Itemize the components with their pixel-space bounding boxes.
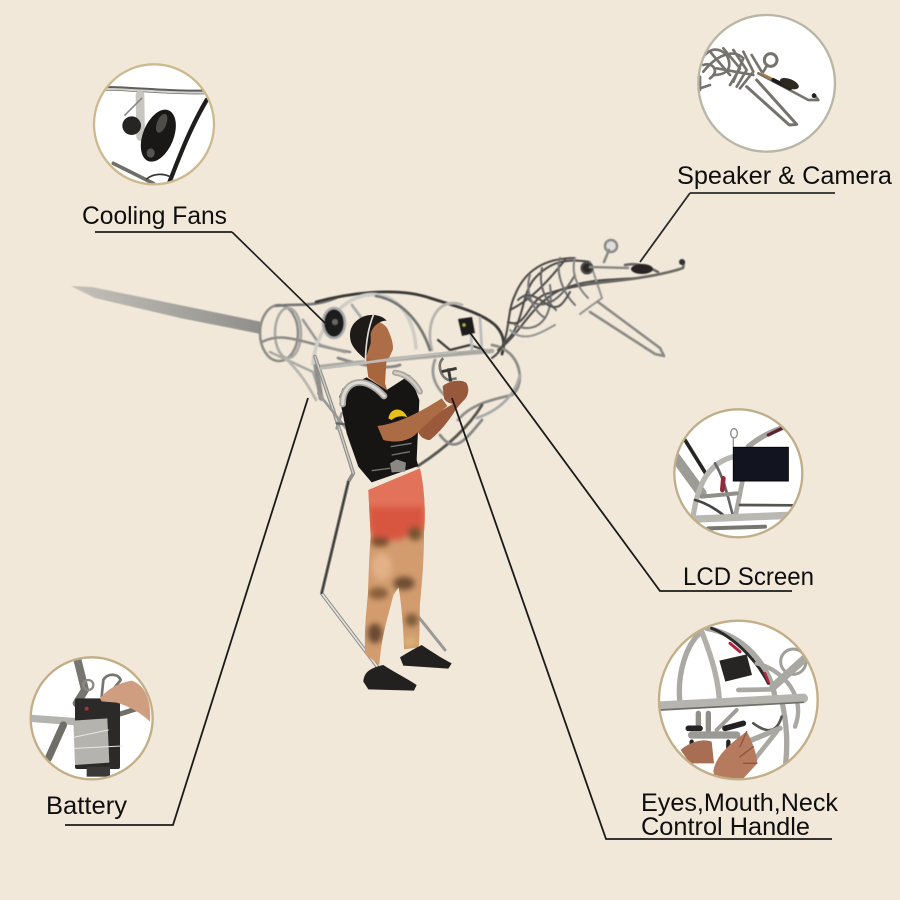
- LCD screen on frame: [458, 317, 475, 336]
- black shirt: [339, 375, 419, 482]
- callout line: speaker and camera: [640, 193, 835, 262]
- hair: [350, 315, 387, 359]
- face: [358, 321, 393, 360]
- callout line: LCD screen: [468, 330, 792, 591]
- body cage arcs: [313, 292, 520, 466]
- right shoe: [400, 645, 452, 669]
- callout line: control handle: [452, 398, 832, 839]
- neck: [365, 353, 387, 391]
- label: Cooling Fans: Cooling Fans: [82, 202, 227, 230]
- shirt logo: [388, 409, 407, 420]
- legs: [364, 468, 425, 665]
- inset: speaker and camera: [698, 15, 835, 152]
- label: Eyes, Mouth, Neck Control Handle: Eyes,Mouth,Neck: [641, 789, 838, 817]
- label: Eyes, Mouth, Neck Control Handle: [641, 789, 838, 841]
- belt buckle: [390, 459, 406, 472]
- left shoe: [363, 665, 417, 691]
- far arm: [417, 397, 467, 440]
- label: Battery: Battery: [46, 792, 128, 820]
- rear cage: [260, 298, 350, 400]
- label: Speaker & Camera: Speaker & Camera: [677, 162, 892, 190]
- near arm: [377, 398, 447, 442]
- inset: control handle: [659, 621, 818, 779]
- callout line: cooling fans: [95, 231, 232, 233]
- shirt print: [372, 443, 412, 471]
- tail spike: [71, 286, 262, 334]
- robot rear leg: [315, 357, 445, 683]
- callout leader: cooling fans: [232, 232, 325, 323]
- frame bar across neck: [320, 352, 457, 368]
- handle grip: [442, 368, 457, 382]
- fan on frame: [323, 308, 345, 338]
- person wearing frame: [315, 313, 468, 691]
- jaw and beak: [585, 240, 685, 356]
- label: LCD Screen: LCD Screen: [683, 563, 814, 591]
- dinosaur wire frame: [71, 240, 685, 466]
- hands: [443, 381, 468, 404]
- tail-to-neck support strut: [316, 366, 321, 398]
- horizontal main bar: [321, 351, 492, 367]
- front hoop over head: [365, 313, 374, 362]
- inset: LCD screen: [674, 409, 802, 537]
- shoulder pads: [343, 373, 420, 404]
- label: Eyes, Mouth, Neck Control Handle: Control Handle: [641, 813, 810, 841]
- callout line: battery: [65, 398, 308, 825]
- handle: [440, 358, 457, 380]
- inset: battery: [30, 657, 153, 779]
- neck and head cage: [492, 258, 640, 358]
- inset: cooling fan: [94, 64, 214, 185]
